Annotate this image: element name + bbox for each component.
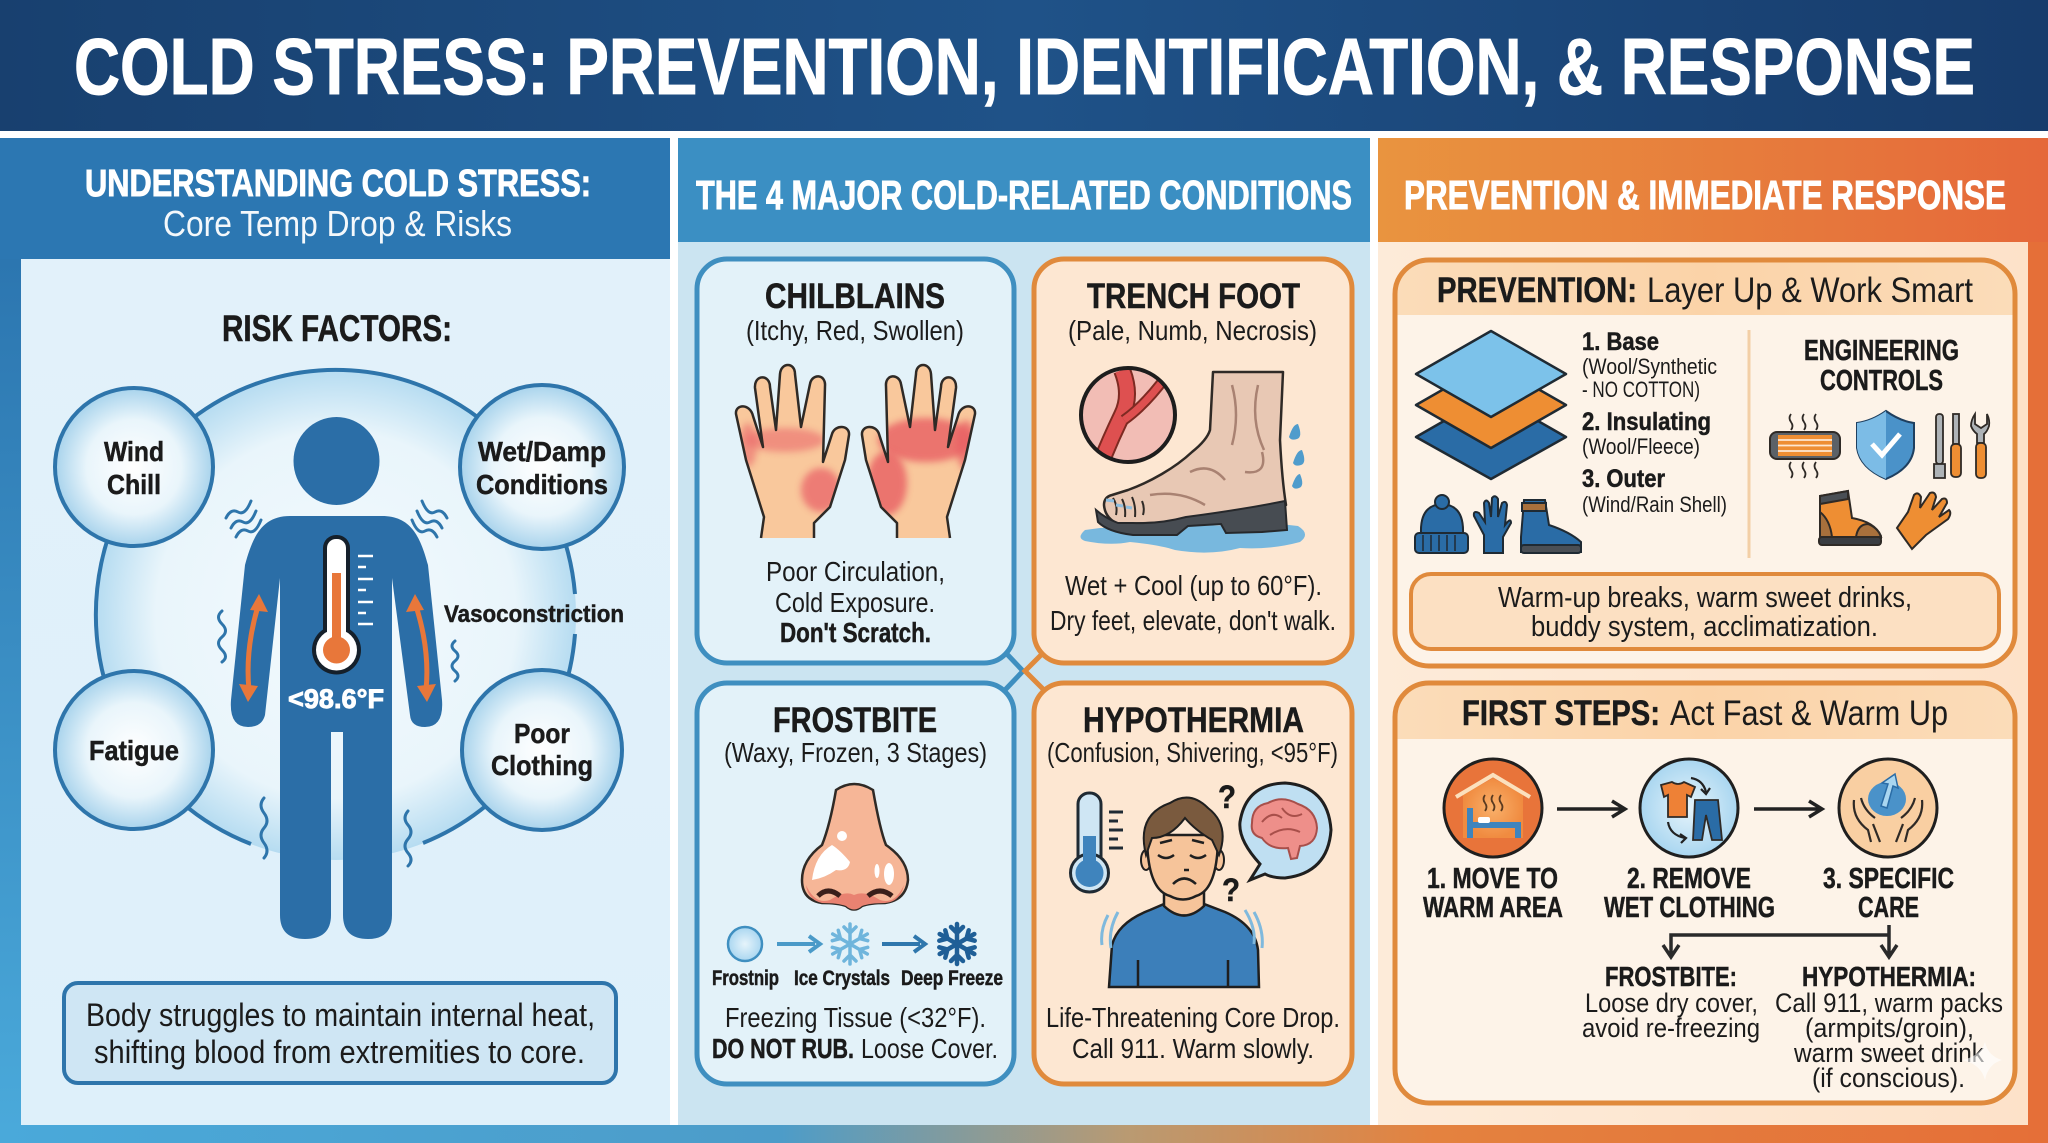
hypothermia care text: Call 911, warm packs xyxy=(1775,988,2003,1018)
step labels: 2. REMOVE xyxy=(1627,863,1751,895)
hypothermia care text: (if conscious). xyxy=(1812,1063,1965,1093)
frostbite care text: Loose dry cover, xyxy=(1585,988,1758,1018)
panel heading xyxy=(85,163,591,244)
card: frostbite: (Waxy, Frozen, 3 Stages) xyxy=(724,737,987,768)
engineering controls heading: CONTROLS xyxy=(1820,365,1943,397)
card: frostbite xyxy=(697,683,1014,1084)
connector lines xyxy=(1005,652,1044,690)
card: chilblains: Poor Circulation, xyxy=(766,556,945,587)
diagram: frostbite stages: Frostnip xyxy=(712,967,779,990)
hypothermia care text xyxy=(1775,961,2003,1093)
icon: question marks: ? xyxy=(1218,779,1236,815)
panel: understanding cold stress xyxy=(0,138,670,1129)
diagram: body with risk factors xyxy=(55,370,624,939)
icon: brain thought bubble xyxy=(1240,783,1331,880)
panel heading: Core Temp Drop & Risks xyxy=(163,203,512,244)
sparkle mark xyxy=(1962,1042,2002,1080)
risk factor: fatigue: Fatigue xyxy=(89,735,179,766)
step labels: 1. MOVE TO xyxy=(1427,863,1558,895)
risk factors heading: RISK FACTORS: xyxy=(222,308,452,349)
card: first steps: FIRST STEPS: xyxy=(1462,694,1660,733)
diagram: frostbite stages xyxy=(712,924,1003,990)
step labels: WET CLOTHING xyxy=(1604,892,1775,924)
card: first steps xyxy=(1395,683,2015,1103)
icon: right hand xyxy=(862,365,976,538)
card: hypothermia xyxy=(1034,683,1352,1084)
icon: caring hands xyxy=(1839,759,1937,857)
icon: wet foot xyxy=(1080,372,1305,553)
step labels: CARE xyxy=(1858,892,1919,924)
risk factor: wind chill: Wind xyxy=(104,436,164,467)
callout: work practices: buddy system, acclimatization. xyxy=(1531,611,1878,643)
hypothermia care text: HYPOTHERMIA: xyxy=(1802,961,1976,992)
card: hypothermia: HYPOTHERMIA xyxy=(1083,701,1304,740)
icon: clothing layers xyxy=(1416,331,1566,479)
card: first steps: Act Fast & Warm Up xyxy=(1670,694,1948,733)
panel heading: UNDERSTANDING COLD STRESS: xyxy=(85,163,591,205)
thermometer xyxy=(312,535,373,674)
diagram: frostbite stages: Ice Crystals xyxy=(794,967,890,990)
icon: frostbitten nose xyxy=(802,784,908,910)
callout: work practices: Warm-up breaks, warm sweet drinks, xyxy=(1498,582,1912,614)
callout: heat shift: Body struggles to maintain internal heat, xyxy=(86,997,595,1033)
risk factor: wet damp conditions xyxy=(460,385,624,549)
hypothermia care text: warm sweet drink xyxy=(1793,1038,1984,1068)
arrows: blood flow xyxy=(239,594,436,702)
risk factor: poor clothing xyxy=(462,670,622,830)
bottom gradient strip xyxy=(0,1125,2048,1143)
icon: cold thermometer xyxy=(1070,793,1123,892)
risk factor: wet damp conditions: Wet/Damp xyxy=(478,436,606,467)
header banner xyxy=(0,0,2048,131)
layer list: 1. Base xyxy=(1582,328,1659,356)
icon: question marks: ? xyxy=(1222,872,1240,908)
step labels: WARM AREA xyxy=(1423,892,1563,924)
layer list: 2. Insulating xyxy=(1582,408,1711,436)
card: chilblains: Don't Scratch. xyxy=(780,617,931,648)
frostbite care text xyxy=(1582,961,1760,1043)
step labels: 3. SPECIFIC xyxy=(1823,863,1954,895)
panel heading: THE 4 MAJOR COLD-RELATED CONDITIONS xyxy=(696,172,1352,218)
risk factor: poor clothing: Poor xyxy=(514,718,570,749)
card: prevention xyxy=(1395,260,2015,666)
card: trench foot xyxy=(1034,259,1352,663)
layer list: (Wool/Fleece) xyxy=(1582,434,1700,459)
layer list: (Wool/Synthetic xyxy=(1582,354,1717,379)
temperature label: <98.6°F xyxy=(288,684,384,714)
icon: winter gear xyxy=(1415,495,1581,553)
icon: heater xyxy=(1770,414,1840,478)
risk factor: wind chill: Chill xyxy=(107,469,161,500)
icon: tissue inset xyxy=(1081,368,1175,465)
icon: work boot xyxy=(1819,491,1881,545)
card: trench foot: (Pale, Numb, Necrosis) xyxy=(1068,315,1317,346)
layer list: (Wind/Rain Shell) xyxy=(1582,492,1727,517)
panel: 4 major conditions xyxy=(678,138,1370,1125)
icon: work glove xyxy=(1897,492,1950,549)
frostbite care text: avoid re-freezing xyxy=(1582,1013,1760,1043)
engineering controls heading xyxy=(1804,335,1959,397)
card: chilblains: Cold Exposure. xyxy=(775,587,935,618)
card: trench foot: TRENCH FOOT xyxy=(1087,277,1300,316)
card: prevention: Layer Up & Work Smart xyxy=(1647,271,1973,310)
risk factor: fatigue xyxy=(55,671,213,829)
diagram: frostbite stages: Deep Freeze xyxy=(901,967,1003,990)
card: trench foot: Dry feet, elevate, don't walk. xyxy=(1050,605,1336,636)
icon: tools xyxy=(1934,414,1989,478)
card: prevention: PREVENTION: xyxy=(1437,271,1637,310)
card: hypothermia: Life-Threatening Core Drop. xyxy=(1046,1002,1340,1033)
icon: left hand xyxy=(736,365,849,538)
hypothermia care text: (armpits/groin), xyxy=(1805,1013,1974,1043)
risk factor: poor clothing: Clothing xyxy=(491,750,593,781)
callout: heat shift xyxy=(64,983,616,1083)
engineering controls heading: ENGINEERING xyxy=(1804,335,1959,367)
shiver marks xyxy=(218,501,458,866)
card: frostbite: DO NOT RUB. xyxy=(712,1033,854,1064)
layer list: - NO COTTON) xyxy=(1582,377,1700,402)
card: frostbite: FROSTBITE xyxy=(773,701,937,740)
icon: swap clothing xyxy=(1640,759,1738,857)
icon: warm shelter xyxy=(1444,759,1542,857)
branch arrows xyxy=(1663,925,1897,957)
icon: question marks xyxy=(1218,779,1240,908)
panel: prevention and response xyxy=(1378,138,2048,1143)
human figure xyxy=(231,417,442,939)
card: chilblains xyxy=(697,259,1014,663)
layer list xyxy=(1582,328,1727,517)
risk factor: wind chill xyxy=(55,388,213,546)
vasoconstriction label: Vasoconstriction xyxy=(444,601,624,628)
card: hypothermia: (Confusion, Shivering, <95°F) xyxy=(1047,737,1338,768)
callout: heat shift: shifting blood from extremities to core. xyxy=(94,1034,585,1070)
card: chilblains: CHILBLAINS xyxy=(765,277,945,316)
icon: confused person xyxy=(1102,798,1262,987)
layer list: 3. Outer xyxy=(1582,465,1665,493)
frostbite care text: FROSTBITE: xyxy=(1605,961,1737,992)
step labels xyxy=(1423,863,1954,924)
card: chilblains: (Itchy, Red, Swollen) xyxy=(746,315,964,346)
arrow xyxy=(1557,801,1625,817)
card: hypothermia: Call 911. Warm slowly. xyxy=(1072,1033,1314,1064)
risk factor: wet damp conditions: Conditions xyxy=(476,469,608,500)
card: trench foot: Wet + Cool (up to 60°F). xyxy=(1065,570,1322,601)
card: frostbite: Freezing Tissue (<32°F). xyxy=(725,1002,986,1033)
callout: work practices xyxy=(1411,574,1999,649)
icon: shield xyxy=(1857,411,1914,479)
card: frostbite: Loose Cover. xyxy=(861,1033,998,1064)
arrow xyxy=(1754,801,1822,817)
